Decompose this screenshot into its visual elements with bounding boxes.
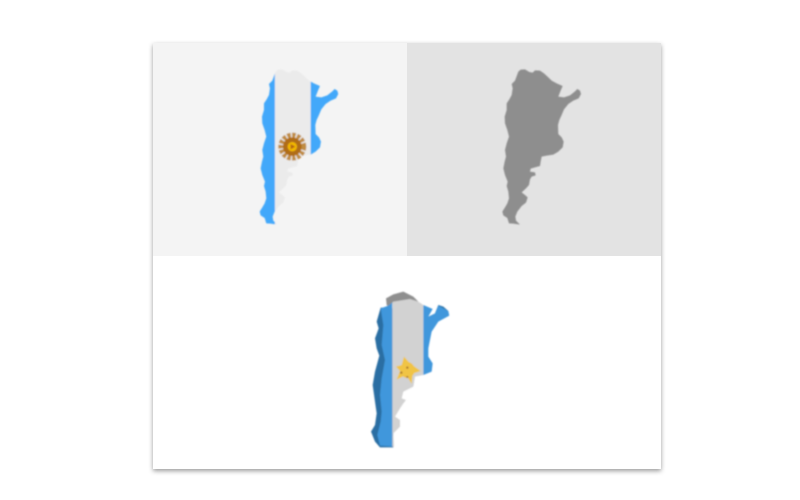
3D extruded map of Argentina (370, 290, 450, 448)
map extrusion side (371, 292, 448, 447)
card panel (153, 43, 661, 469)
grey silhouette map of Argentina (502, 69, 581, 225)
map top face (376, 298, 450, 448)
icon: sun emblem (396, 357, 421, 384)
panel: flag map background (153, 43, 407, 256)
icon: sun emblem (281, 136, 303, 158)
panel: silhouette map background (407, 43, 661, 256)
flag-coloured map of Argentina (258, 70, 339, 226)
